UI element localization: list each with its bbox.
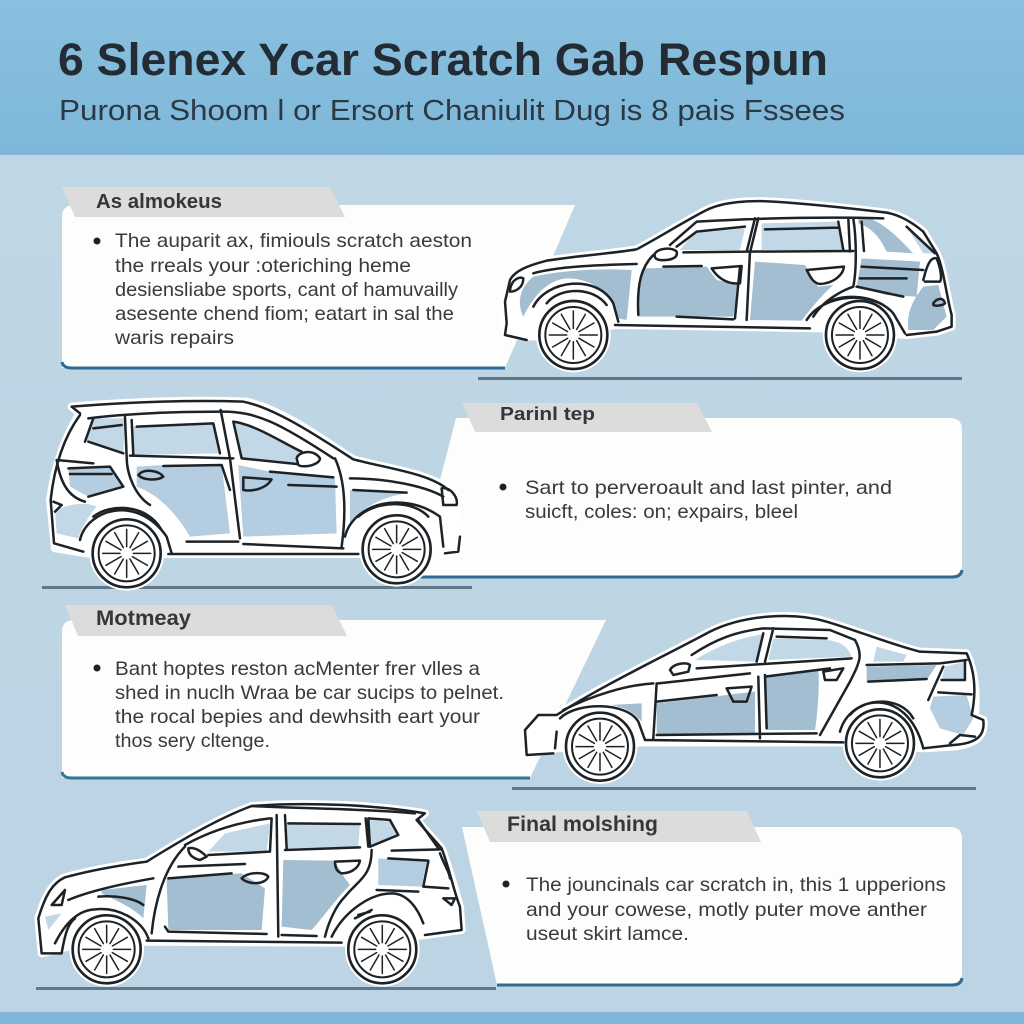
bullet text: the rocal bepies and dewhsith eart your — [115, 706, 481, 728]
panel: step 2 — [415, 403, 962, 577]
bullet text: asesente chend fiom; eatart in sal the — [115, 303, 454, 325]
bullet text — [94, 658, 504, 752]
bullet text: The jouncinals car scratch in, this 1 upperions — [526, 874, 946, 896]
bullet text: useut skirt lamce. — [526, 923, 689, 945]
ground line 2 — [42, 586, 472, 589]
tab heading — [62, 187, 345, 217]
tab heading: As almokeus — [96, 191, 222, 213]
bullet text — [500, 477, 892, 523]
car illustration 1 — [505, 201, 952, 372]
header banner — [0, 0, 1024, 155]
subtitle: Purona Shoom l or Ersort Chaniulit Dug is 8 pais Fssees — [59, 95, 845, 127]
bullet text: Bant hoptes reston acMenter frer vlles a — [115, 658, 480, 680]
tab heading — [477, 811, 761, 842]
panel: step 4 — [462, 811, 962, 985]
bullet text — [94, 230, 472, 349]
bullet text: waris repairs — [114, 327, 234, 349]
bullet text: shed in nuclh Wraa be car sucips to pelnet. — [115, 682, 504, 704]
bottom strip — [0, 1012, 1024, 1024]
bullet text: suicft, coles: on; expairs, bleel — [525, 501, 798, 523]
tab heading: Parinl tep — [500, 404, 595, 424]
tab heading: Final molshing — [507, 813, 658, 836]
car illustration 4 — [38, 804, 462, 987]
car illustration 2 — [50, 401, 460, 591]
bullet text — [502, 874, 946, 945]
tab heading — [65, 605, 347, 636]
bullet text: the rreals your :oteriching heme — [115, 255, 411, 277]
tab heading: Motmeay — [96, 607, 191, 630]
bullet text: thos sery cltenge. — [115, 730, 270, 752]
car illustration 3 — [525, 616, 984, 784]
panel: step 3 — [62, 605, 606, 778]
panel: step 1 — [62, 187, 575, 368]
ground line 3 — [512, 787, 976, 790]
ground line 1 — [478, 377, 962, 380]
bullet text: desiensliabe sports, cant of hamuvailly — [115, 279, 458, 301]
bullet text: Sart to perveroault and last pinter, and — [525, 477, 892, 499]
title: 6 Slenex Ycar Scratch Gab Respun — [58, 34, 828, 85]
tab heading — [462, 403, 712, 432]
bullet text: The auparit ax, fimiouls scratch aeston — [115, 230, 472, 252]
ground line 4 — [36, 987, 496, 990]
bullet text: and your cowese, motly puter move anther — [526, 899, 928, 921]
